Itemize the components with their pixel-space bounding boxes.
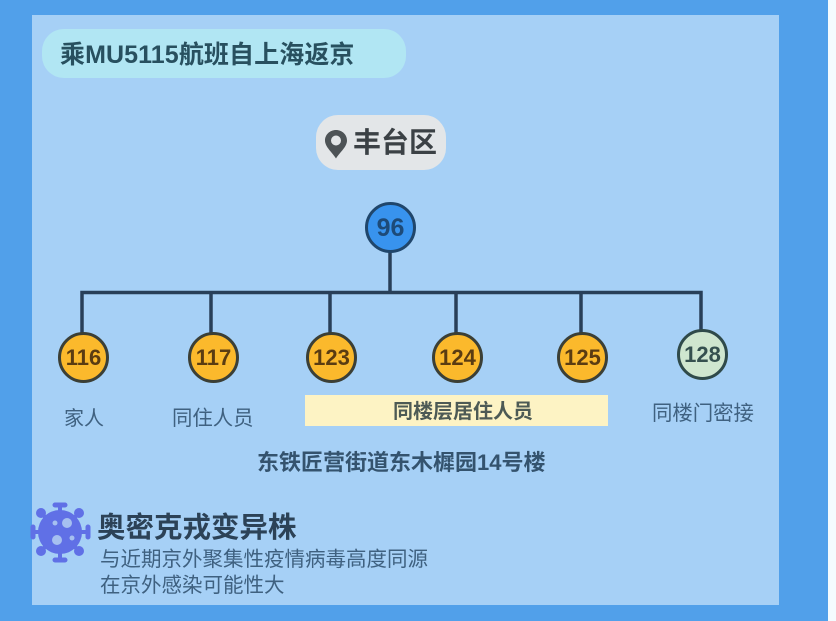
icon: virus: [30, 502, 90, 562]
label: same-building close contact: 同楼门密接: [652, 403, 754, 425]
label: family: 家人: [64, 408, 104, 430]
label: housemates: 同住人员: [172, 408, 254, 430]
district name: 丰台区: [353, 127, 437, 158]
case node 96: [365, 202, 416, 253]
case node 123: [306, 332, 357, 383]
case node 128: 128: [684, 342, 721, 367]
variant description: 与近期京外聚集性疫情病毒高度同源: [100, 548, 428, 571]
case node 123: 123: [313, 345, 350, 370]
variant description: 在京外感染可能性大: [100, 574, 284, 597]
case node 116: [58, 332, 109, 383]
district label pill: [316, 115, 446, 170]
band label: 同楼层居住人员: [393, 401, 533, 423]
icon: location pin: [325, 130, 347, 158]
same-floor residents band: [305, 395, 608, 426]
heading text: 乘MU5115航班自上海返京: [60, 41, 355, 69]
case node 96: 96: [377, 214, 404, 242]
case node 124: 124: [439, 345, 476, 370]
case node 117: 117: [196, 345, 231, 370]
case node 125: 125: [564, 345, 601, 370]
case node 125: [557, 332, 608, 383]
variant description: [100, 548, 428, 597]
case node 116: 116: [66, 345, 101, 370]
case node 128: [677, 329, 728, 380]
case node 124: [432, 332, 483, 383]
address line: 东铁匠营街道东木樨园14号楼: [257, 450, 545, 475]
case node 117: [188, 332, 239, 383]
variant title: 奥密克戎变异株: [97, 512, 297, 544]
heading pill: [42, 29, 406, 78]
